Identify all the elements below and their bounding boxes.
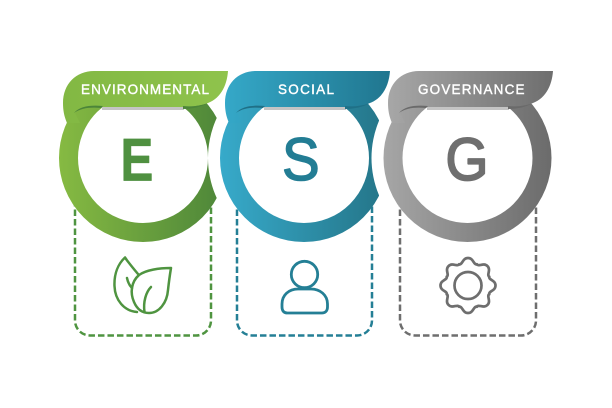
letter: G: G <box>446 127 488 194</box>
icon: gear <box>440 258 496 313</box>
dashed box: environmental <box>75 200 211 336</box>
ring: environmental <box>68 84 218 232</box>
icon: leaves <box>114 258 171 313</box>
ribbon: social <box>225 71 390 123</box>
panel: governance <box>388 71 553 336</box>
letter: E: E <box>120 126 153 194</box>
panel: environmental <box>63 71 228 336</box>
label: SOCIAL: SOCIAL <box>278 82 334 97</box>
ring: social <box>230 84 378 232</box>
ribbon: governance <box>388 71 553 123</box>
label: ENVIRONMENTAL: ENVIRONMENTAL <box>81 82 209 97</box>
ribbon: environmental <box>63 71 228 123</box>
dashed box: governance <box>400 200 536 336</box>
dashed box: social <box>237 200 372 336</box>
ring: governance <box>393 84 542 232</box>
label: GOVERNANCE: GOVERNANCE <box>418 82 524 97</box>
letter: S: S <box>282 126 320 193</box>
icon: person <box>282 261 328 313</box>
panel: social <box>225 71 390 336</box>
